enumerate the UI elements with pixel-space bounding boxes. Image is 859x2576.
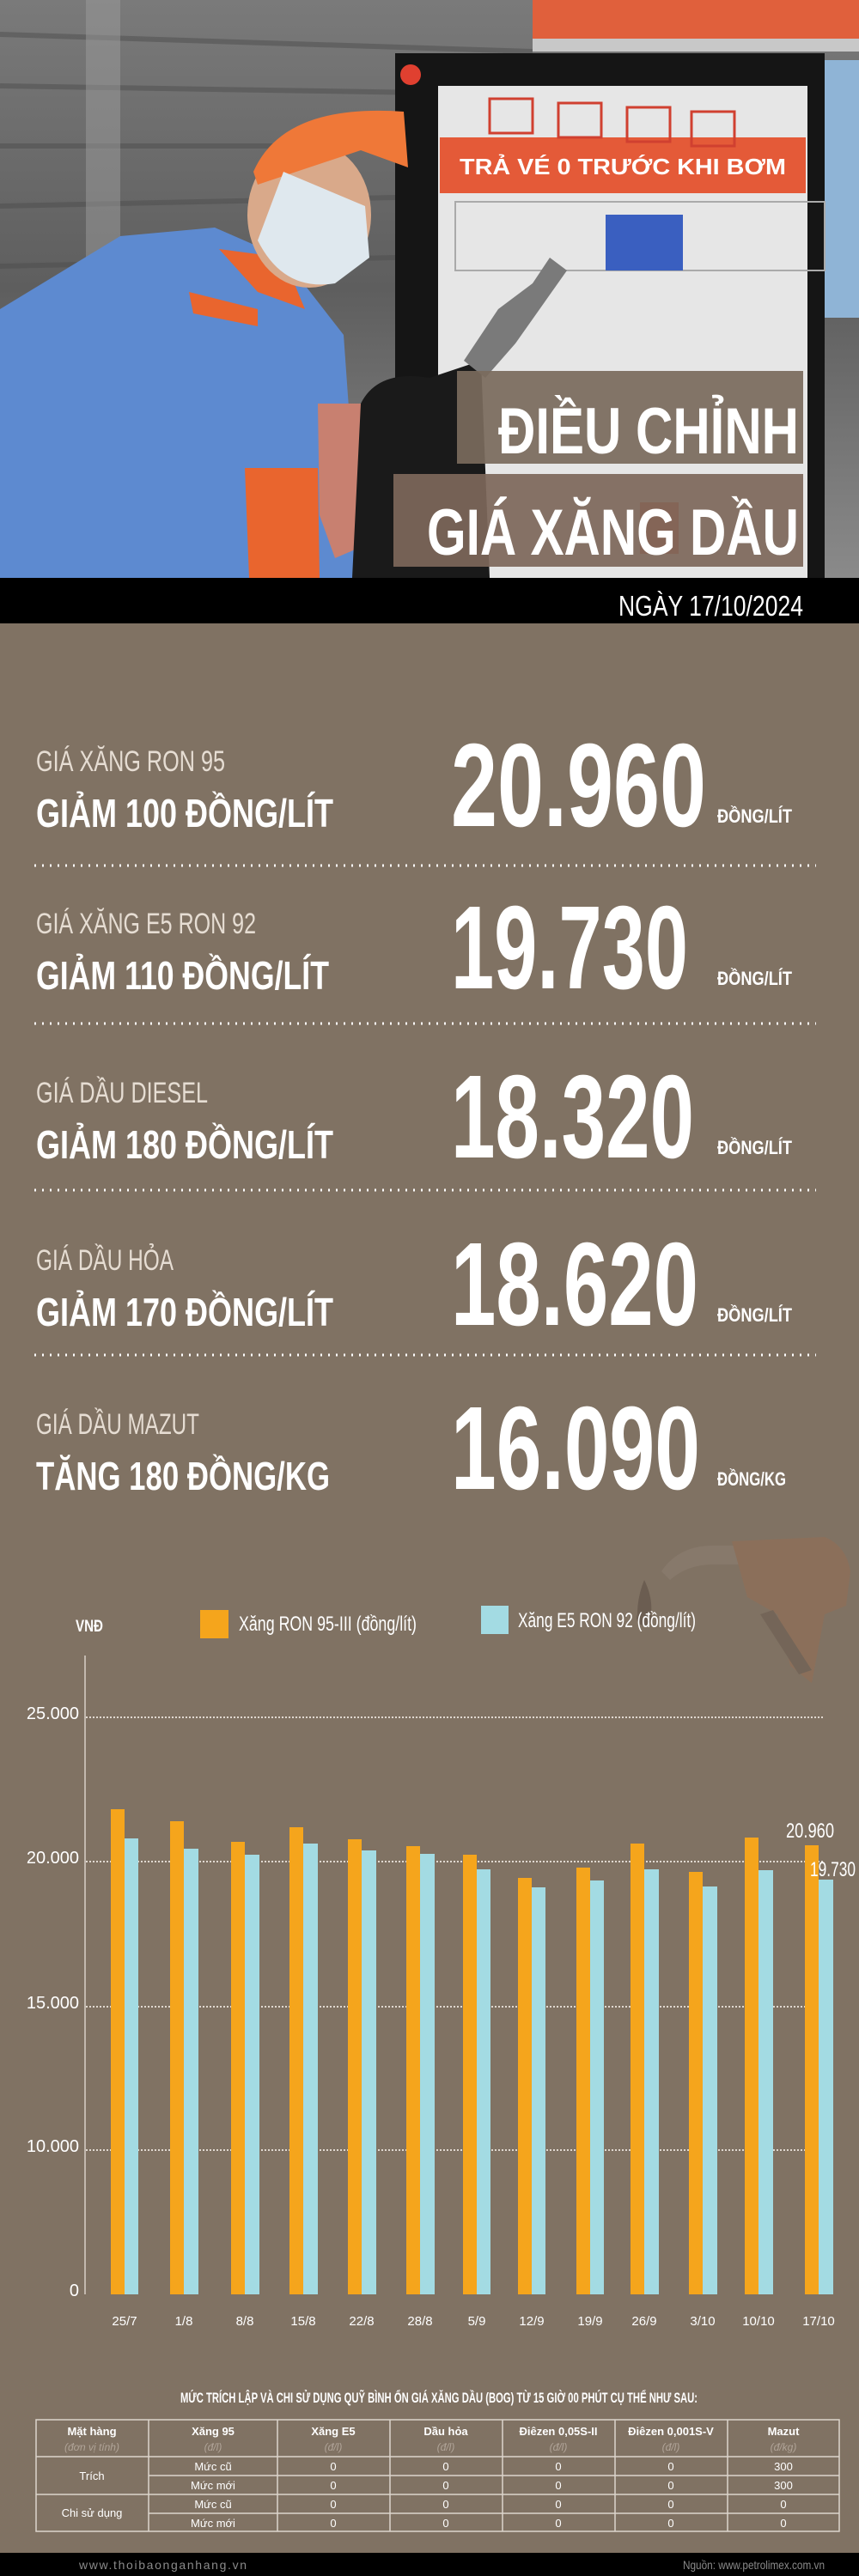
bar chart: 26/9 (631, 2314, 657, 2329)
date band (0, 578, 859, 623)
price row: mazut: 16.090 (451, 1382, 700, 1515)
table: BOG fund: Xăng 95 (192, 2425, 235, 2438)
price row: RON 95: GIẢM 100 ĐỒNG/LÍT (36, 791, 333, 835)
chart legend: Xăng RON 95-III (đồng/lít) (239, 1613, 417, 1636)
pump (395, 53, 825, 578)
nozzle (352, 361, 490, 578)
table: BOG fund: 0 (667, 2479, 674, 2492)
bar chart: 3/10 (690, 2314, 716, 2329)
table: BOG fund: 0 (555, 2479, 562, 2492)
table: BOG fund: (đ/l) (204, 2441, 222, 2453)
chart legend: Xăng E5 RON 92 (đồng/lít) (518, 1609, 696, 1632)
price row: diesel: GIẢM 180 ĐỒNG/LÍT (36, 1122, 333, 1167)
head (247, 142, 371, 288)
footer: Nguồn: www.petrolimex.com.vn (683, 2558, 825, 2572)
bar chart: 5/9 (468, 2314, 485, 2329)
bar chart: 22/8 (349, 2314, 375, 2329)
table: BOG fund: 0 (667, 2498, 674, 2511)
bar chart: 25/7 (112, 2314, 137, 2329)
title box 1 (457, 371, 803, 468)
header photo (0, 0, 859, 578)
icon: fuel nozzle (637, 1537, 850, 1683)
red sign top (533, 0, 859, 39)
title box 2 (393, 474, 803, 569)
table: BOG fund: 0 (555, 2498, 562, 2511)
price row: kerosene: 18.620 (451, 1218, 698, 1351)
price row: mazut: ĐỒNG/KG (717, 1468, 786, 1490)
table: BOG fund: Dầu hỏa (423, 2425, 468, 2438)
table: BOG fund: 0 (442, 2460, 449, 2473)
table: BOG fund: 0 (555, 2460, 562, 2473)
table: BOG fund: Chi sử dụng (62, 2506, 122, 2519)
table: BOG fund: 0 (667, 2517, 674, 2530)
bar chart: 17/10 (802, 2314, 835, 2329)
table: BOG fund: Mức mới (191, 2517, 235, 2530)
table: BOG fund (36, 2420, 839, 2531)
table: BOG fund: 0 (330, 2479, 337, 2492)
table: BOG fund: Mặt hàng (67, 2425, 117, 2438)
table: BOG fund: (đ/l) (662, 2441, 679, 2453)
bar chart: 25.000 (27, 1704, 79, 1723)
bar chart: 10.000 (27, 2137, 79, 2156)
table: BOG fund: Mazut (768, 2425, 800, 2438)
table: BOG fund: 300 (774, 2460, 793, 2473)
table: BOG fund: Điêzen 0,05S-II (519, 2425, 598, 2438)
price row: diesel: ĐỒNG/LÍT (717, 1137, 792, 1158)
table: BOG fund: 300 (774, 2479, 793, 2492)
price row: E5 RON 92: GIÁ XĂNG E5 RON 92 (36, 908, 256, 940)
bar chart: 12/9 (519, 2314, 545, 2329)
table: BOG fund: (đ/l) (550, 2441, 567, 2453)
bar chart: 15/8 (290, 2314, 316, 2329)
table: BOG fund: 0 (330, 2517, 337, 2530)
table: BOG fund: (đơn vị tính) (64, 2441, 119, 2453)
table: BOG fund: 0 (555, 2517, 562, 2530)
price row: RON 95: 20.960 (451, 720, 706, 852)
table: BOG fund: 0 (780, 2517, 787, 2530)
price row: E5 RON 92 (36, 882, 792, 1014)
bar chart (27, 1656, 856, 2329)
table: BOG fund: 0 (780, 2498, 787, 2511)
bar chart: 0 (70, 2281, 79, 2300)
table: BOG fund: 0 (667, 2460, 674, 2473)
price row: mazut: TĂNG 180 ĐỒNG/KG (36, 1454, 330, 1498)
header photo: TRẢ VÉ 0 TRƯỚC KHI BƠM (460, 154, 786, 179)
price row: kerosene: GIÁ DẦU HỎA (36, 1244, 174, 1277)
chart legend: VNĐ (76, 1618, 103, 1636)
price row: mazut (36, 1382, 786, 1515)
chart legend (76, 1606, 696, 1638)
table: BOG fund: Xăng E5 (311, 2425, 356, 2438)
table: BOG fund: Mức cũ (194, 2460, 232, 2473)
price row: RON 95: GIÁ XĂNG RON 95 (36, 745, 225, 778)
table: BOG fund: Mức cũ (194, 2498, 232, 2511)
footer (0, 2553, 859, 2576)
table: BOG fund: (đ/kg) (771, 2441, 796, 2453)
price row: E5 RON 92: 19.730 (451, 882, 688, 1014)
table: BOG fund: (đ/l) (437, 2441, 454, 2453)
price row: RON 95: ĐỒNG/LÍT (717, 805, 792, 827)
date band: NGÀY 17/10/2024 (618, 590, 803, 622)
table: BOG fund: Điêzen 0,001S-V (628, 2425, 714, 2438)
bar chart: 15.000 (27, 1994, 79, 2013)
bar chart: 10/10 (742, 2314, 775, 2329)
table: BOG fund: Mức mới (191, 2479, 235, 2492)
price row: E5 RON 92: GIẢM 110 ĐỒNG/LÍT (36, 953, 329, 998)
price row: diesel: GIÁ DẦU DIESEL (36, 1077, 208, 1109)
worker body (0, 228, 361, 578)
price row: diesel (36, 1051, 792, 1183)
bar chart: 20.960 (786, 1820, 834, 1843)
price row: diesel: 18.320 (451, 1051, 694, 1183)
price row: kerosene: GIẢM 170 ĐỒNG/LÍT (36, 1290, 333, 1334)
table: BOG fund: Trích (79, 2470, 105, 2482)
price row: kerosene (36, 1218, 792, 1351)
footer: www.thoibaonganhang.vn (78, 2558, 247, 2572)
table: BOG fund: 0 (330, 2460, 337, 2473)
bar chart: 19/9 (577, 2314, 603, 2329)
price row: RON 95 (36, 720, 792, 852)
bar chart: 20.000 (27, 1849, 79, 1868)
bar chart: 1/8 (175, 2314, 192, 2329)
table: BOG fund: 0 (442, 2498, 449, 2511)
table: BOG fund: (đ/l) (325, 2441, 342, 2453)
bar chart: 28/8 (407, 2314, 433, 2329)
price row: E5 RON 92: ĐỒNG/LÍT (717, 968, 792, 989)
bar chart: 8/8 (236, 2314, 253, 2329)
price row: mazut: GIÁ DẦU MAZUT (36, 1408, 199, 1441)
table: BOG fund: 0 (330, 2498, 337, 2511)
table: BOG fund: 0 (442, 2517, 449, 2530)
table: BOG fund: 0 (442, 2479, 449, 2492)
price row: kerosene: ĐỒNG/LÍT (717, 1304, 792, 1326)
